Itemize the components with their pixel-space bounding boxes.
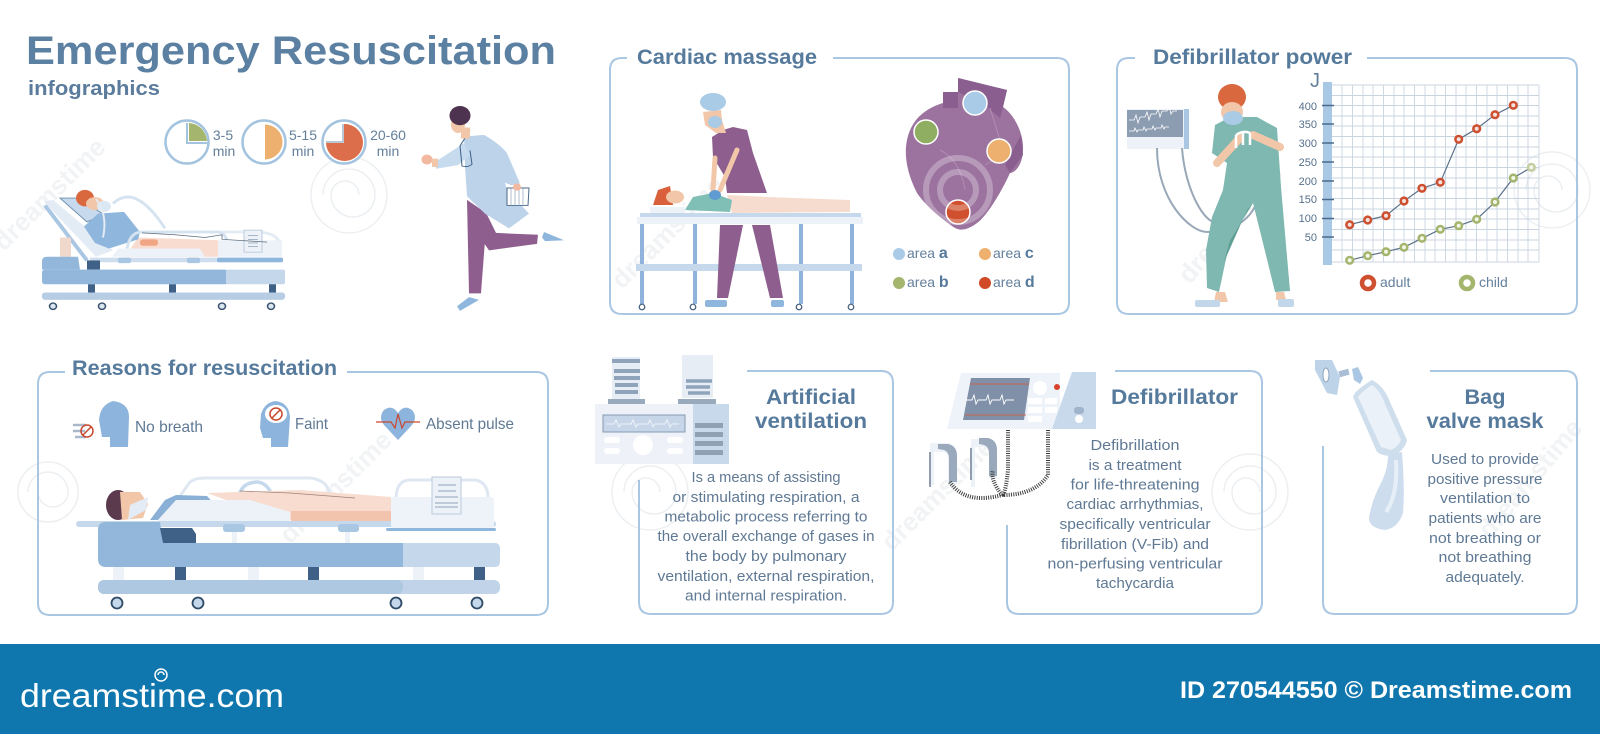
clock: 20-60 min: 20-60 xyxy=(370,127,406,143)
heading: bag valve mask: Bag xyxy=(1464,386,1506,409)
body text: the overall exchange of gases in xyxy=(658,528,874,545)
body text: non-perfusing ventricular xyxy=(1048,556,1222,572)
heading: defibrillator: Defibrillator xyxy=(1111,386,1238,409)
reason: no breath xyxy=(73,401,203,447)
heading: artificial ventilation: ventilation xyxy=(755,410,867,433)
reason: faint xyxy=(260,401,329,447)
body text: specifically ventricular xyxy=(1060,516,1210,533)
ventilator machine xyxy=(595,355,729,464)
reason: absent pulse xyxy=(376,408,514,440)
heart area legend: area b xyxy=(907,274,949,291)
body text: ventilation to xyxy=(1440,490,1530,507)
image id: ID 270544550 © Dreamstime.com xyxy=(1180,677,1572,704)
heading: artificial ventilation xyxy=(755,386,867,433)
series: child xyxy=(1346,164,1535,264)
clock: 3-5 min xyxy=(166,120,235,164)
panel: artificial ventilation xyxy=(595,355,893,614)
body text: not breathing or xyxy=(1429,530,1541,547)
body text: for life-threatening xyxy=(1070,476,1200,494)
reason: faint: Faint xyxy=(295,416,329,433)
panel: reasons for resuscitation xyxy=(38,357,548,615)
monitor xyxy=(1127,106,1189,149)
large hospital bed with patient xyxy=(76,477,500,608)
doctor with paddles xyxy=(1195,84,1294,307)
cables xyxy=(1157,148,1260,232)
heading: defibrillator power: Defibrillator power xyxy=(1153,46,1352,69)
massage table xyxy=(636,213,863,310)
heading: bag valve mask xyxy=(1426,386,1544,433)
chart grid xyxy=(1332,85,1539,262)
body text: positive pressure xyxy=(1428,471,1542,488)
title: Emergency Resuscitation xyxy=(26,29,556,73)
body text: Is a means of assisting xyxy=(692,469,840,486)
body text xyxy=(658,469,874,604)
chart legend xyxy=(1362,274,1508,290)
body text: patients who are xyxy=(1428,510,1542,527)
time clocks xyxy=(166,120,406,164)
nurse performing compressions xyxy=(700,93,784,307)
chart legend: adult xyxy=(1380,274,1410,290)
body text xyxy=(1428,451,1542,586)
text: dreamstime xyxy=(875,432,999,556)
reason: absent pulse: Absent pulse xyxy=(426,416,514,433)
text: dreamstime xyxy=(1472,413,1588,544)
clock: 5-15 min xyxy=(242,120,317,164)
heart area legend xyxy=(893,245,1035,291)
clock: 5-15 min: 5-15 xyxy=(289,127,317,143)
reason: no breath: No breath xyxy=(135,419,203,436)
energy line chart: 400 xyxy=(1299,101,1317,113)
clock: 20-60 min: min xyxy=(377,143,399,159)
body text: cardiac arrhythmias, xyxy=(1066,496,1204,513)
logo wordmark: dreamstime.com xyxy=(20,677,284,714)
body text: or stimulating respiration, a xyxy=(672,489,860,506)
running doctor xyxy=(422,106,564,311)
energy line chart: 150 xyxy=(1299,194,1317,206)
body text: fibrillation (V-Fib) and xyxy=(1061,536,1209,553)
heart area legend: area a xyxy=(907,245,948,262)
bag valve mask device xyxy=(1315,360,1407,530)
small hospital bed with patient xyxy=(42,190,285,309)
clock: 20-60 min xyxy=(322,120,406,164)
energy line chart xyxy=(1299,70,1539,265)
title xyxy=(26,29,556,100)
body text: Defibrillation xyxy=(1090,437,1180,454)
energy line chart: 250 xyxy=(1299,157,1317,169)
body text: metabolic process referring to xyxy=(664,508,868,526)
heart diagram xyxy=(906,78,1023,230)
clock: 3-5 min: 3-5 xyxy=(213,127,233,143)
defibrillator device xyxy=(930,372,1096,498)
logo spiral xyxy=(155,669,167,681)
body text xyxy=(1048,437,1222,592)
text: dreamstime xyxy=(273,425,397,549)
body text: adequately. xyxy=(1446,569,1524,586)
energy line chart: 200 xyxy=(1299,176,1317,188)
energy line chart: J xyxy=(1310,70,1320,92)
body text: and internal respiration. xyxy=(685,588,847,604)
clock: 3-5 min: min xyxy=(213,143,235,159)
title: infographics xyxy=(28,78,160,100)
heading: bag valve mask: valve mask xyxy=(1426,410,1544,433)
energy line chart: 100 xyxy=(1299,213,1317,225)
heading: cardiac massage: Cardiac massage xyxy=(637,46,817,69)
panel: defibrillator xyxy=(930,371,1262,614)
panel: bag valve mask xyxy=(1315,360,1577,614)
clock: 5-15 min: min xyxy=(292,143,314,159)
chart legend: child xyxy=(1479,274,1508,290)
energy line chart: 350 xyxy=(1299,119,1317,131)
coiled cables xyxy=(950,430,1048,498)
text: dreamstime xyxy=(1172,158,1288,289)
heart area legend: area c xyxy=(993,245,1034,262)
panel: defibrillator power xyxy=(1117,46,1577,314)
footer banner xyxy=(0,644,1600,734)
heart area legend: area d xyxy=(993,274,1035,291)
text: dreamstime xyxy=(605,170,729,294)
body text: tachycardia xyxy=(1096,575,1175,592)
body text: Used to provide xyxy=(1431,451,1539,468)
paddles xyxy=(930,438,997,487)
energy line chart: 50 xyxy=(1305,232,1317,244)
energy line chart: 300 xyxy=(1299,138,1317,150)
panel: cardiac massage xyxy=(610,46,1069,314)
heading: artificial ventilation: Artificial xyxy=(766,386,856,409)
body text: is a treatment xyxy=(1088,457,1182,474)
body text: the body by pulmonary xyxy=(686,548,847,565)
body text: not breathing xyxy=(1438,549,1532,566)
patient on table xyxy=(650,186,850,213)
series: adult xyxy=(1346,102,1517,228)
heading: reasons for resuscitation: Reasons for resuscitation xyxy=(72,357,337,380)
body text: ventilation, external respiration, xyxy=(658,568,874,585)
